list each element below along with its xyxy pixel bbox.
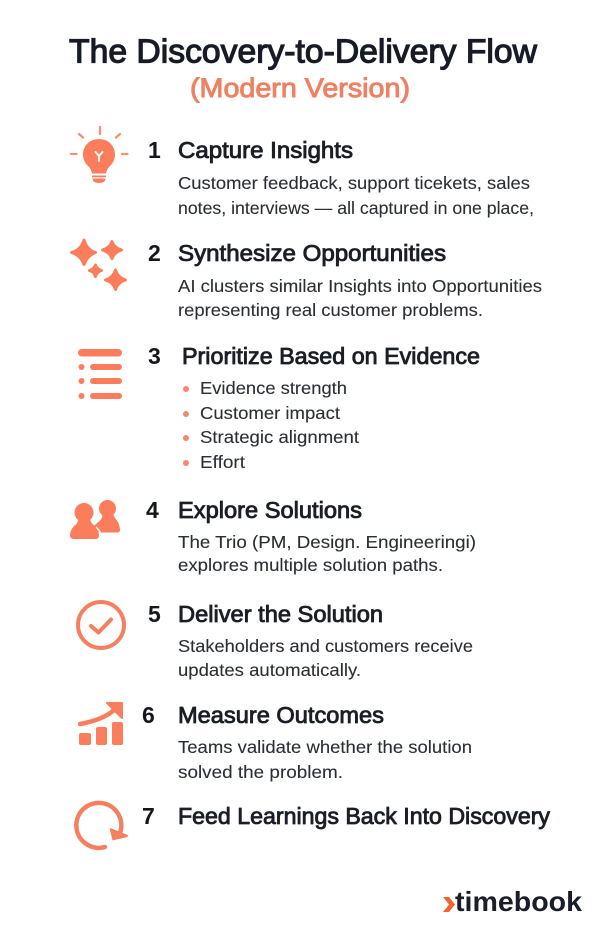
description: Teams validate whether the solution [178,737,472,757]
heading: Synthesize Opportunities [178,240,446,266]
step 1: capture insights [71,127,534,218]
subtitle: (Modern Version) [190,73,410,103]
icon: loop arrow [76,803,127,848]
icon: list [78,349,122,399]
step 4: explore solutions [70,497,476,575]
description [178,636,473,680]
bullet list: Strategic alignment [200,427,359,447]
heading: Capture Insights [178,137,353,163]
description: solved the problem. [178,762,343,782]
bullet list [183,378,359,472]
bullet list: Evidence strength [200,378,347,398]
description [178,532,476,575]
heading: Explore Solutions [178,497,362,523]
heading: Prioritize Based on Evidence [182,343,480,369]
step 5: deliver the solution [78,601,473,680]
bullet list: Effort [200,452,245,472]
number 7: 7 [142,803,155,829]
heading: Feed Learnings Back Into Discovery [178,803,550,829]
description: Customer feedback, support ticekets, sales [178,173,530,193]
heading: Measure Outcomes [178,702,384,728]
description: representing real customer problems. [178,300,483,320]
heading: Deliver the Solution [178,601,383,627]
step 2: synthesize opportunities [72,240,542,320]
icon: sparkles [72,240,126,290]
description [178,276,542,320]
title: The Discovery-to-Delivery Flow [69,32,537,70]
description: updates automatically. [178,660,361,680]
number 5: 5 [148,601,161,627]
description: notes, interviews — all captured in one place, [178,198,534,218]
number 6: 6 [142,702,155,728]
number 2: 2 [148,240,161,266]
bullet list: Customer impact [200,403,340,423]
number 4: 4 [146,497,159,523]
number 1: 1 [148,137,161,163]
icon: light bulb [71,127,128,183]
description [178,173,534,218]
description: Stakeholders and customers receive [178,636,473,656]
step 3: prioritize based on evidence [78,343,480,472]
step 7: feed learnings back into discovery [76,803,550,848]
description: AI clusters similar Insights into Opportunities [178,276,542,296]
icon: people [70,500,120,539]
step 6: measure outcomes [79,702,472,782]
description: The Trio (PM, Design. Engineeringi) [178,532,476,552]
description: explores multiple solution paths. [178,555,443,575]
icon: growth chart [79,703,123,745]
icon: check circle [78,602,124,648]
number 3: 3 [148,343,161,369]
logo: timebook: timebook [455,886,582,917]
description [178,737,472,782]
